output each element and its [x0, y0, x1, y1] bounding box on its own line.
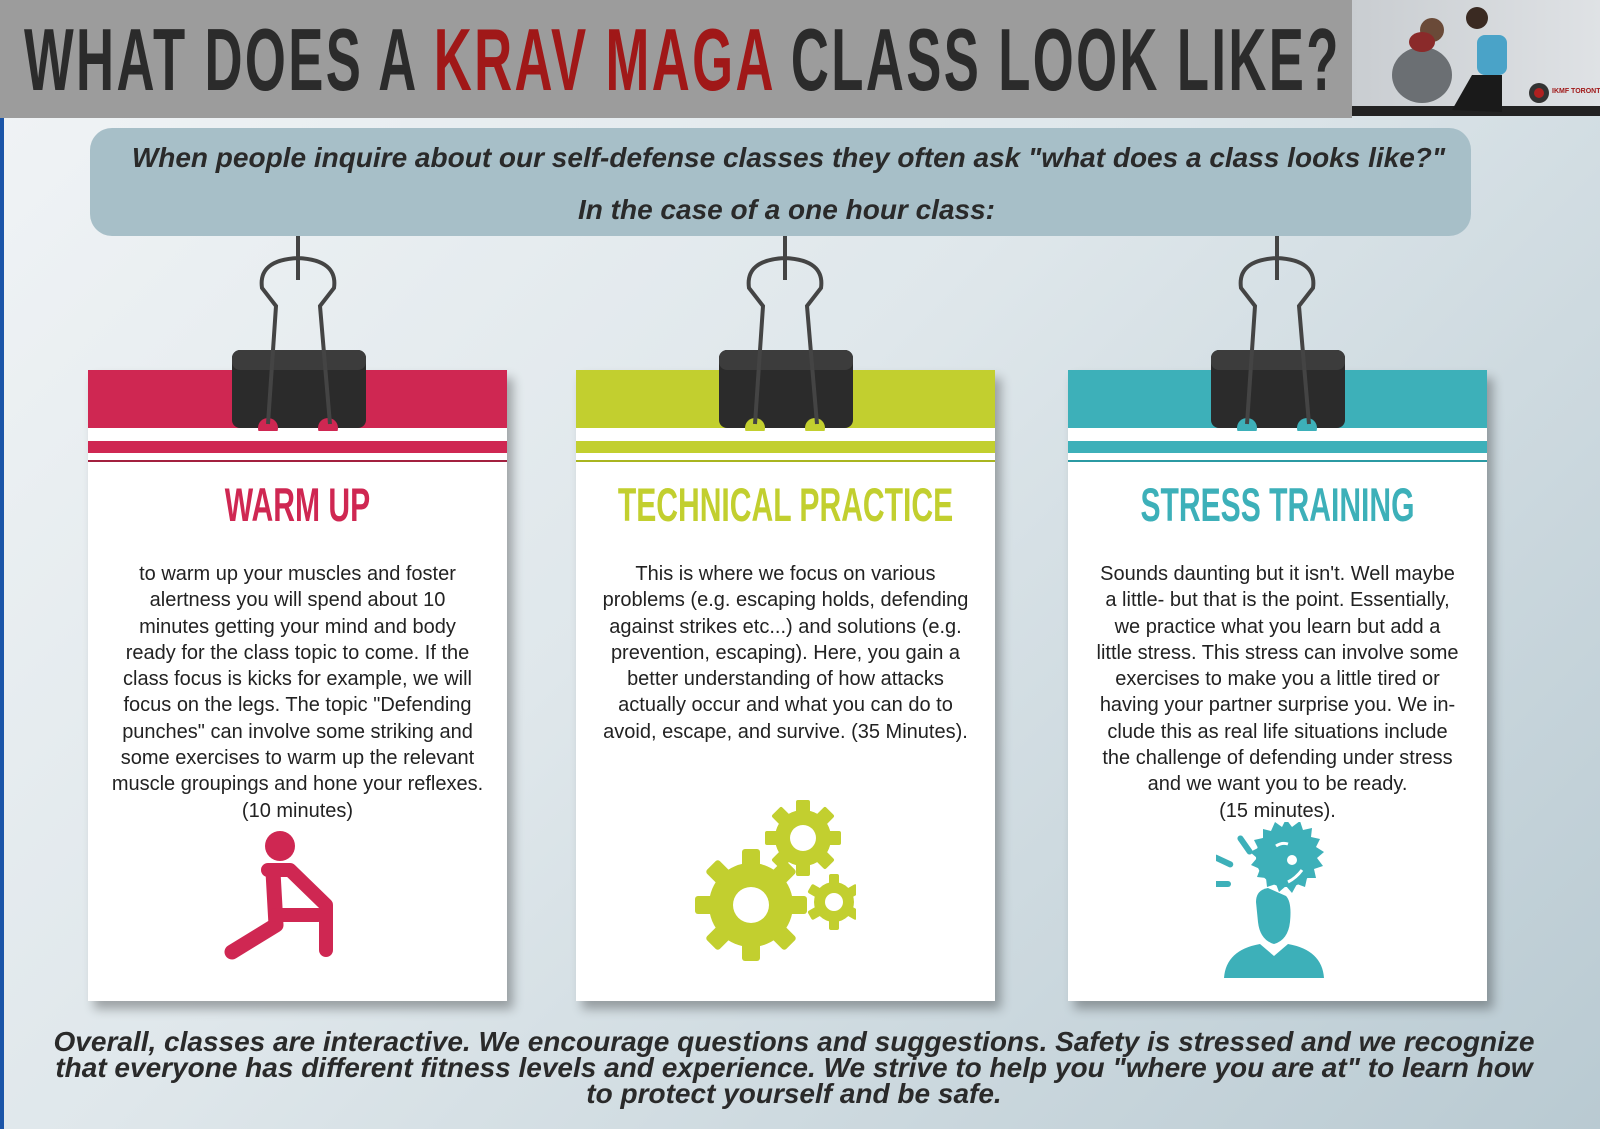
text: warm up: focus on the legs. The topic "Defending	[123, 694, 472, 716]
text: technical practice: problems (e.g. escaping holds, defending	[603, 589, 968, 611]
heading: stress training: STRESS TRAINING	[1140, 478, 1415, 531]
clip: warm up	[232, 236, 366, 431]
header band	[0, 0, 1352, 118]
clip: technical practice	[719, 236, 853, 431]
text: technical practice: avoid, escape, and survive. (35 Minutes).	[603, 721, 968, 743]
text: stress training: clude this as real life situations include	[1107, 721, 1448, 743]
intro line 1: When people inquire about our self-defense classes they often ask "what does a class looks like?"	[132, 142, 1445, 173]
text: stress training: a little- but that is the point. Essentially,	[1105, 589, 1450, 611]
footer text	[54, 1026, 1534, 1109]
text: warm up: punches" can involve some striking and	[122, 721, 473, 743]
icon: gears	[695, 800, 856, 961]
text: stress training: Sounds daunting but it isn't. Well maybe	[1100, 563, 1455, 585]
text: warm up: some exercises to warm up the relevant	[121, 747, 474, 769]
text: warm up: alertness you will spend about 10	[150, 589, 445, 611]
heading: technical practice: TECHNICAL PRACTICE	[618, 478, 953, 531]
intro line 2: In the case of a one hour class:	[578, 194, 995, 225]
text: technical practice: This is where we focus on various	[635, 563, 936, 585]
text: technical practice: against strikes etc...) and solutions (e.g.	[609, 616, 962, 638]
text: stress training: having your partner surprise you. We in-	[1100, 694, 1455, 716]
intro box	[90, 128, 1471, 236]
text: technical practice: better understanding of how attacks	[627, 668, 944, 690]
footer text: that everyone has different fitness levels and experience. We strive to help you "where you are at" to learn how	[55, 1052, 1533, 1083]
footer text: Overall, classes are interactive. We encourage questions and suggestions. Safety is stressed and we recognize	[54, 1026, 1534, 1057]
text: stress training: and we want you to be ready.	[1148, 773, 1407, 795]
text: warm up: minutes getting your mind and body	[139, 616, 456, 638]
heading: warm up: WARM UP	[225, 478, 370, 531]
text: warm up: muscle groupings and hone your reflexes.	[112, 773, 483, 795]
text: warm up: (10 minutes)	[242, 800, 353, 822]
text: warm up: to warm up your muscles and foster	[139, 563, 456, 585]
icon: stressed head with saw	[1216, 822, 1324, 978]
photo	[1352, 0, 1600, 116]
text: warm up: class focus is kicks for example, we will	[123, 668, 472, 690]
text: stress training	[1096, 563, 1458, 822]
left blue edge	[0, 118, 4, 1129]
text: technical practice	[603, 563, 968, 743]
panel: warm up	[88, 370, 507, 1001]
text: warm up: ready for the class topic to come. If the	[126, 642, 469, 664]
text: stress training: little stress. This stress can involve some	[1096, 642, 1458, 664]
text: stress training: we practice what you learn but add a	[1115, 616, 1440, 638]
icon: stretching person	[224, 831, 333, 960]
text: stress training: (15 minutes).	[1219, 800, 1336, 822]
clip: stress training	[1211, 236, 1345, 431]
text: stress training: the challenge of defending under stress	[1102, 747, 1453, 769]
panel: technical practice	[576, 370, 995, 1001]
text: stress training: exercises to make you a little tired or	[1115, 668, 1440, 690]
text: technical practice: actually occur and what you can do to	[618, 694, 953, 716]
footer text: to protect yourself and be safe.	[586, 1078, 1002, 1109]
panel: stress training	[1068, 370, 1487, 1001]
title: WHAT DOES A KRAV MAGA CLASS LOOK LIKE?	[24, 10, 1341, 109]
text: warm up	[112, 563, 483, 822]
text: technical practice: prevention, escaping). Here, you gain a	[611, 642, 960, 664]
